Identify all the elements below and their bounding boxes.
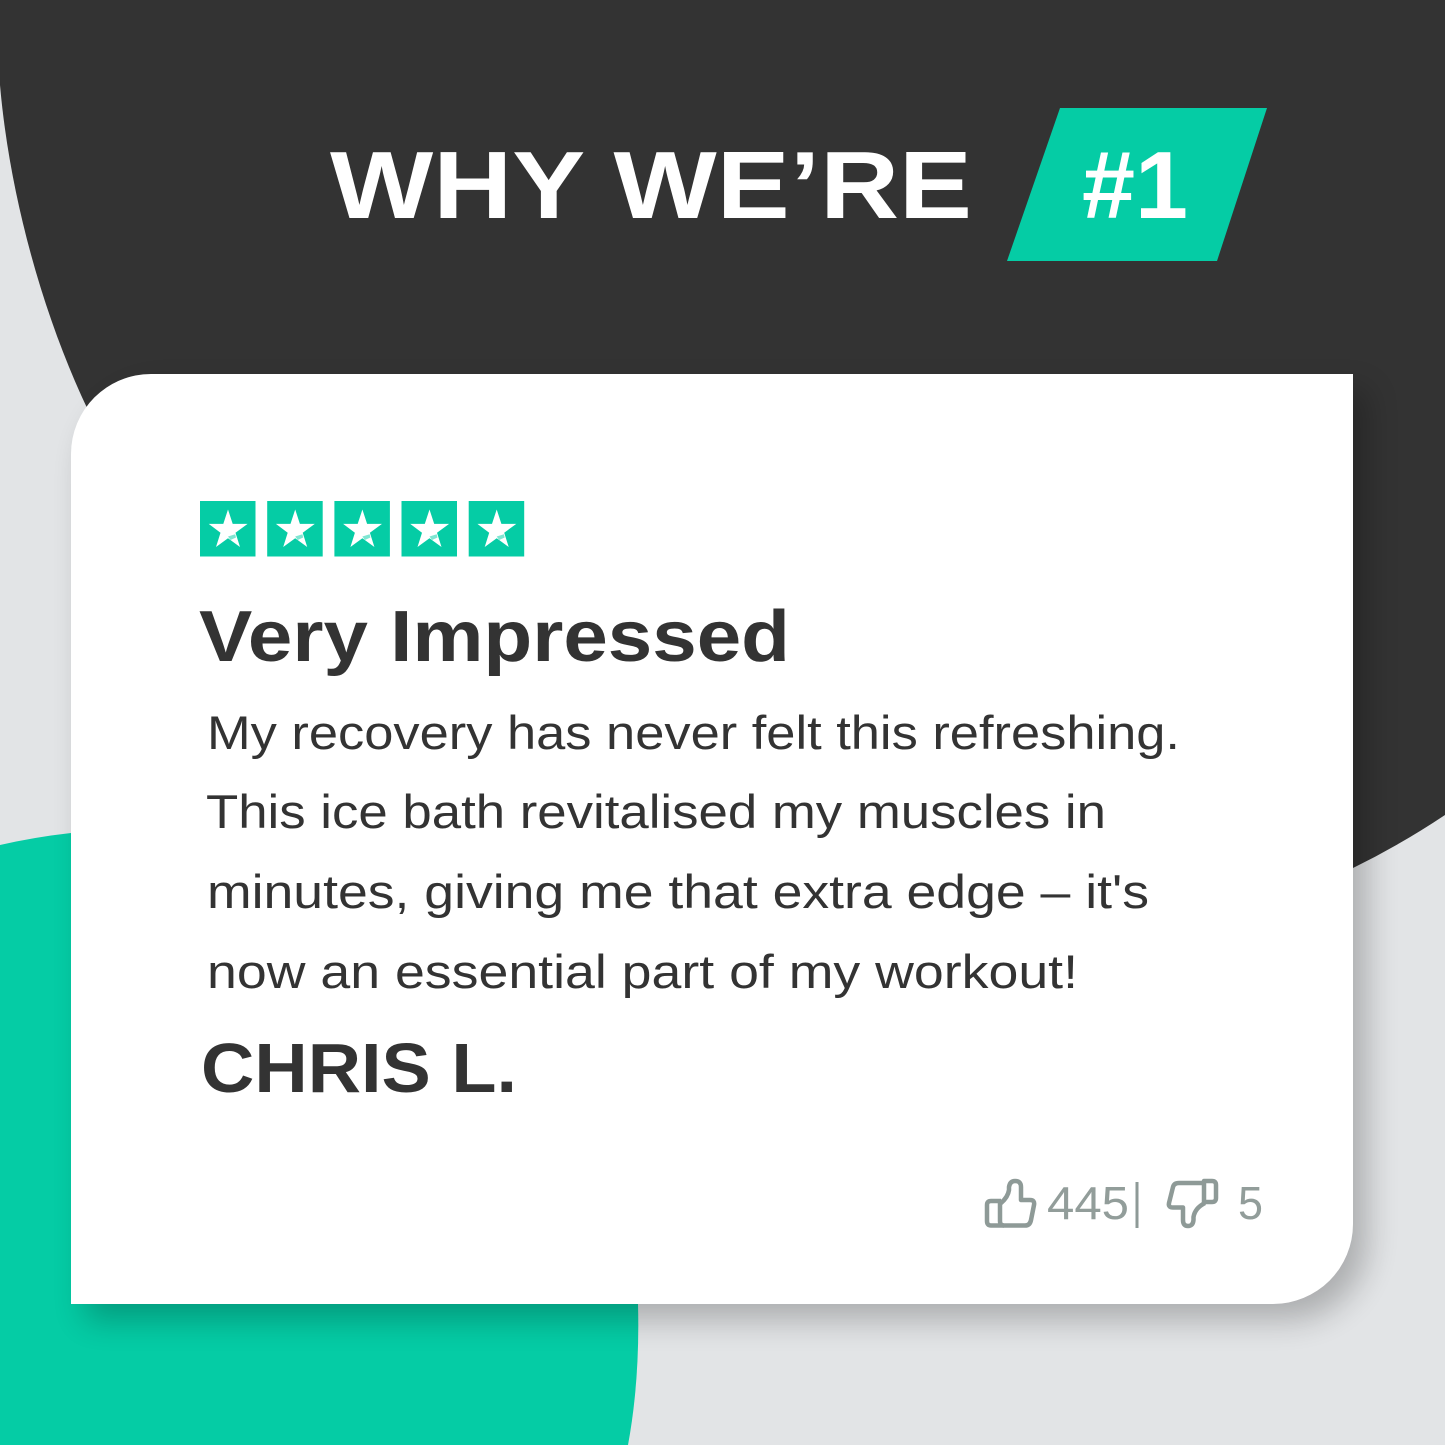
panel: review card [71,374,1353,1304]
review body: This ice bath revitalised my muscles in [206,785,1106,838]
badge: #1 [1007,108,1267,261]
icon: thumbs up [987,1181,1034,1226]
votes [987,1177,1263,1229]
review body [206,706,1180,998]
title [330,108,1267,261]
separator [1136,1182,1138,1228]
card shadow [85,390,1367,1320]
review body: now an essential part of my workout! [207,945,1078,998]
badge: #1: #1 [1082,132,1188,239]
count: dislikes: 5 [1238,1177,1263,1229]
reviewer name: CHRIS L. [201,1029,517,1107]
star rating [200,501,524,556]
dark background shape [0,0,1445,868]
icon: thumbs down [1169,1181,1216,1226]
review body: My recovery has never felt this refreshing. [207,706,1180,759]
green background shape [0,833,638,1445]
count: likes: 445 [1047,1177,1129,1229]
review body: minutes, giving me that extra edge – it's [207,865,1149,918]
review heading: Very Impressed [199,597,790,677]
heading: why we're: WHY WE’RE [330,132,972,239]
